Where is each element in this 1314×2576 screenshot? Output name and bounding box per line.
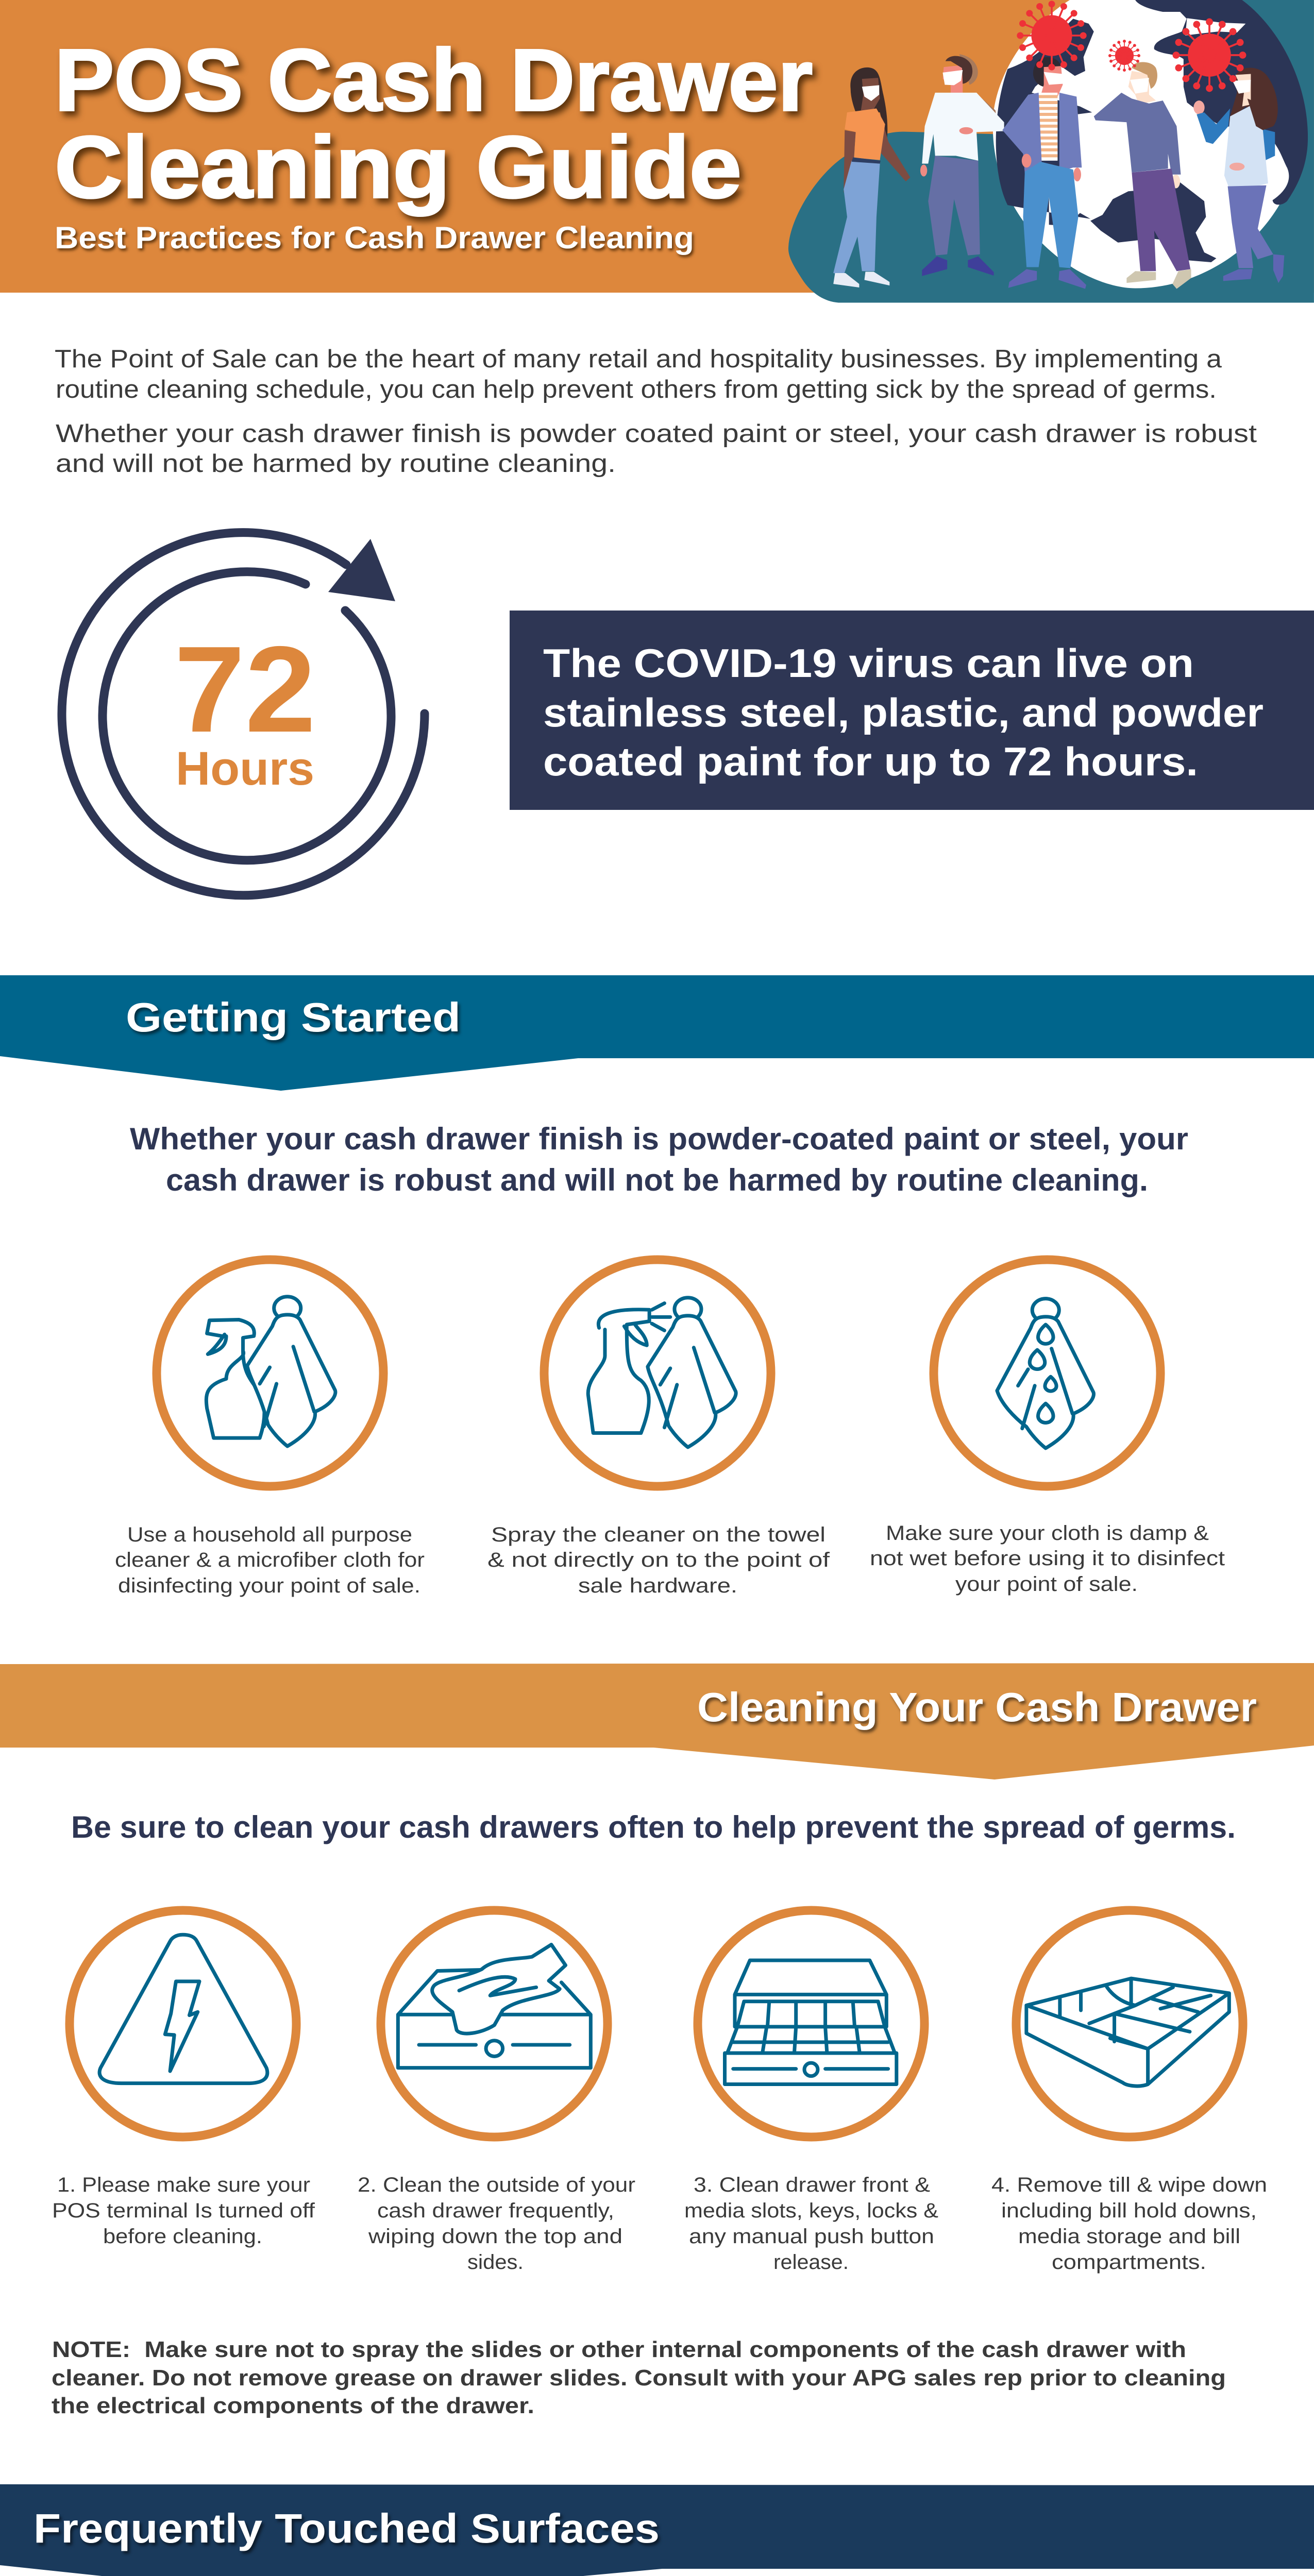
callout: virus lifespan: coated paint for up to 72 hours. <box>543 739 1198 784</box>
icon: spray bottle and cloth <box>206 1297 335 1446</box>
person 2 <box>920 54 1004 276</box>
step: spray on towel <box>487 1260 830 1597</box>
person 4 <box>1094 62 1191 289</box>
title <box>55 31 813 216</box>
section banner: cleaning your cash drawer <box>0 1663 1314 1780</box>
caption: any manual push button <box>689 2225 934 2248</box>
caption <box>52 2174 315 2248</box>
note text: NOTE: Make sure not to spray the slides or other internal components of the cash drawer with <box>52 2337 1186 2362</box>
virus particles <box>1017 1 1246 92</box>
person 3 <box>1002 57 1086 289</box>
caption <box>358 2174 635 2274</box>
caption: sides. <box>467 2251 524 2274</box>
caption: cleaner & a microfiber cloth for <box>115 1549 425 1571</box>
subtitle: Best Practices for Cash Drawer Cleaning <box>55 221 694 255</box>
section banner: frequently touched surfaces: Frequently Touched Surfaces <box>33 2505 660 2551</box>
caption: release. <box>773 2251 849 2274</box>
icon: spraying bottle and cloth <box>588 1298 736 1447</box>
section banner: frequently touched surfaces <box>0 2484 1314 2576</box>
person 5 <box>1193 68 1284 283</box>
caption: POS terminal Is turned off <box>52 2199 315 2222</box>
intro text: and will not be harmed by routine cleaning. <box>56 450 616 478</box>
intro text: Whether your cash drawer finish is powder coated paint or steel, your cash drawer is robust <box>56 420 1257 448</box>
caption: wiping down the top and <box>368 2225 622 2248</box>
caption: media storage and bill <box>1018 2225 1240 2248</box>
step 3: clean drawer front <box>684 1910 938 2274</box>
title: Cleaning Guide <box>55 118 742 216</box>
caption: 2. Clean the outside of your <box>358 2174 635 2196</box>
section banner: cleaning your cash drawer: Cleaning Your Cash Drawer <box>697 1684 1257 1730</box>
caption: not wet before using it to disinfect <box>870 1547 1225 1570</box>
callout: virus lifespan: stainless steel, plastic, and powder <box>543 690 1264 735</box>
caption <box>684 2174 938 2274</box>
72 hours clock icon: Hours <box>176 742 314 795</box>
icon: cloth wiping drawer <box>398 1944 591 2068</box>
caption: 1. Please make sure your <box>57 2174 310 2196</box>
caption <box>991 2174 1267 2274</box>
caption <box>487 1523 830 1597</box>
note text <box>52 2337 1226 2418</box>
caption: Make sure your cloth is damp & <box>886 1522 1209 1545</box>
header banner <box>0 0 1314 302</box>
title: POS Cash Drawer <box>55 31 813 129</box>
caption: compartments. <box>1052 2251 1206 2274</box>
getting started heading: cash drawer is robust and will not be harmed by routine cleaning. <box>166 1163 1148 1197</box>
getting started heading: Whether your cash drawer finish is powder-coated paint or steel, your <box>130 1122 1188 1156</box>
header illustration: people wearing masks in front of a globe <box>788 0 1314 302</box>
section banner: getting started <box>0 975 1314 1091</box>
intro text: The Point of Sale can be the heart of many retail and hospitality businesses. By implementing a <box>55 345 1222 373</box>
caption: your point of sale. <box>955 1573 1138 1596</box>
caption <box>115 1523 425 1597</box>
caption: Spray the cleaner on the towel <box>491 1523 826 1546</box>
person 1 <box>833 67 911 287</box>
caption: & not directly on to the point of <box>487 1549 830 1571</box>
callout: virus lifespan: The COVID-19 virus can live on <box>543 640 1194 686</box>
note text: cleaner. Do not remove grease on drawer slides. Consult with your APG sales rep prior to cleaning <box>52 2365 1226 2391</box>
step 4: remove till <box>991 1910 1267 2274</box>
callout: virus lifespan <box>510 611 1314 810</box>
caption: before cleaning. <box>103 2225 262 2248</box>
caption: including bill hold downs, <box>1001 2199 1257 2222</box>
caption: cash drawer frequently, <box>377 2199 614 2222</box>
caption: disinfecting your point of sale. <box>118 1574 420 1597</box>
icon: damp cloth with drops <box>997 1299 1093 1448</box>
caption: Use a household all purpose <box>127 1523 412 1546</box>
icon: cash till tray <box>1026 1978 1229 2086</box>
caption: sale hardware. <box>578 1574 737 1597</box>
icon: open cash drawer <box>725 1960 897 2084</box>
intro text <box>55 345 1257 478</box>
step 1: power off <box>52 1910 315 2248</box>
caption: 3. Clean drawer front & <box>694 2174 930 2196</box>
72 hours clock icon <box>62 533 425 895</box>
caption <box>870 1522 1225 1596</box>
caption: 4. Remove till & wipe down <box>991 2174 1267 2196</box>
step: household cleaner and cloth <box>115 1260 425 1597</box>
step: damp cloth <box>870 1260 1225 1596</box>
getting started heading <box>130 1122 1188 1197</box>
cleaning heading: Be sure to clean your cash drawers often to help prevent the spread of germs. <box>71 1810 1236 1844</box>
intro text: routine cleaning schedule, you can help prevent others from getting sick by the spread of germs. <box>56 376 1217 403</box>
step 2: wipe outside <box>358 1910 635 2274</box>
caption: media slots, keys, locks & <box>684 2199 938 2222</box>
note text: the electrical components of the drawer. <box>52 2393 534 2418</box>
72 hours clock icon: 72 <box>174 621 316 758</box>
section banner: getting started: Getting Started <box>126 994 461 1040</box>
icon: electrical warning triangle <box>99 1935 267 2083</box>
